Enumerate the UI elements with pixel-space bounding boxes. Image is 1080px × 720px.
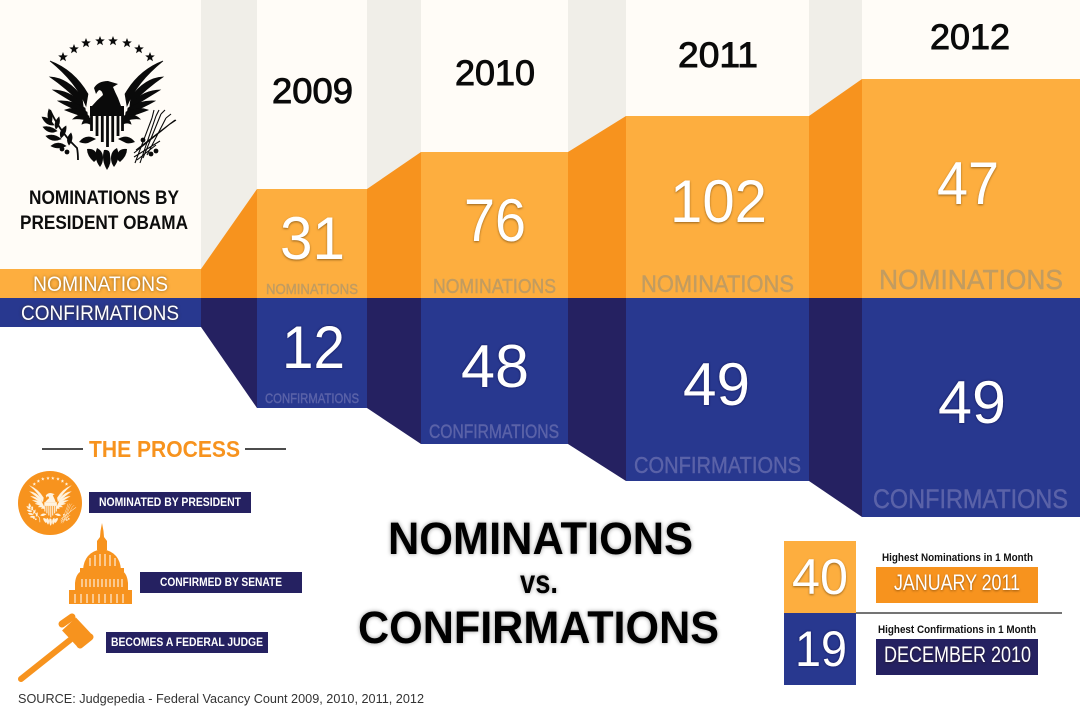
column 2009: CONFIRMATIONS: [265, 390, 359, 406]
main title: vs.: [520, 563, 558, 600]
callout: highest confirmations: DECEMBER 2010: [884, 642, 1031, 667]
icon: gavel: [21, 617, 90, 679]
column 2012: NOMINATIONS: [879, 264, 1063, 295]
step 1: nominated by president: [18, 471, 251, 535]
callout: highest nominations: 40: [792, 549, 848, 605]
column 2010: CONFIRMATIONS: [429, 422, 559, 443]
column 2012: 2012: [930, 18, 1010, 57]
column 2010: 2010: [455, 54, 535, 93]
callout: highest nominations: JANUARY 2011: [894, 570, 1020, 595]
main title: [358, 513, 719, 653]
column 2012: 49: [938, 369, 1006, 436]
callout: highest confirmations: [784, 613, 1038, 685]
chart: folded ribbon of nominations: [0, 79, 1080, 298]
step 1: nominated by president: NOMINATED BY PRESIDENT: [99, 495, 242, 509]
column 2009: NOMINATIONS: [266, 281, 358, 298]
icon: presidential eagle seal: [42, 36, 176, 170]
step 2: confirmed by senate: CONFIRMED BY SENATE: [160, 575, 282, 589]
column 2009: [265, 72, 359, 406]
source note: SOURCE: Judgepedia - Federal Vacancy Count 2009, 2010, 2011, 2012: [18, 691, 424, 706]
callout: highest nominations: [784, 541, 1038, 613]
column 2011: [634, 36, 801, 478]
column 2009: 12: [282, 314, 345, 381]
column 2009: 31: [280, 205, 345, 272]
column 2010: [429, 54, 559, 443]
column 2012: 47: [937, 150, 999, 217]
callout: highest nominations: Highest Nominations in 1 Month: [882, 552, 1033, 564]
column 2011: CONFIRMATIONS: [634, 452, 801, 478]
column 2009: 2009: [272, 72, 353, 111]
background: gray fold strips: [201, 0, 862, 270]
step 3: becomes a federal judge: [21, 617, 268, 679]
heading: nominations by President Obama: NOMINATIONS BY: [29, 188, 179, 209]
column 2011: 49: [683, 351, 750, 418]
heading: nominations by President Obama: PRESIDENT OBAMA: [20, 213, 188, 234]
step 3: becomes a federal judge: BECOMES A FEDERAL JUDGE: [111, 635, 263, 649]
main title: CONFIRMATIONS: [358, 602, 719, 653]
column 2010: 76: [464, 187, 526, 254]
background: cream top area: [0, 0, 1080, 300]
callout: highest confirmations: 19: [795, 621, 847, 677]
step 2: confirmed by senate: [69, 523, 302, 604]
column 2010: 48: [461, 333, 529, 400]
chart: folded ribbon of confirmations: [0, 298, 1080, 517]
column 2011: 2011: [678, 36, 758, 75]
column 2011: 102: [670, 168, 767, 235]
heading: nominations by President Obama: [20, 188, 188, 234]
icon: orange seal: [18, 471, 82, 535]
heading: the process: THE PROCESS: [89, 436, 240, 462]
legend: nominations: NOMINATIONS: [33, 273, 168, 296]
column 2012: [873, 18, 1068, 514]
main title: NOMINATIONS: [388, 513, 693, 564]
icon: capitol building: [69, 523, 132, 604]
legend: confirmations: CONFIRMATIONS: [21, 302, 179, 325]
column 2010: NOMINATIONS: [433, 276, 556, 298]
callout: highest confirmations: Highest Confirmations in 1 Month: [878, 624, 1036, 636]
column 2011: NOMINATIONS: [641, 271, 794, 298]
